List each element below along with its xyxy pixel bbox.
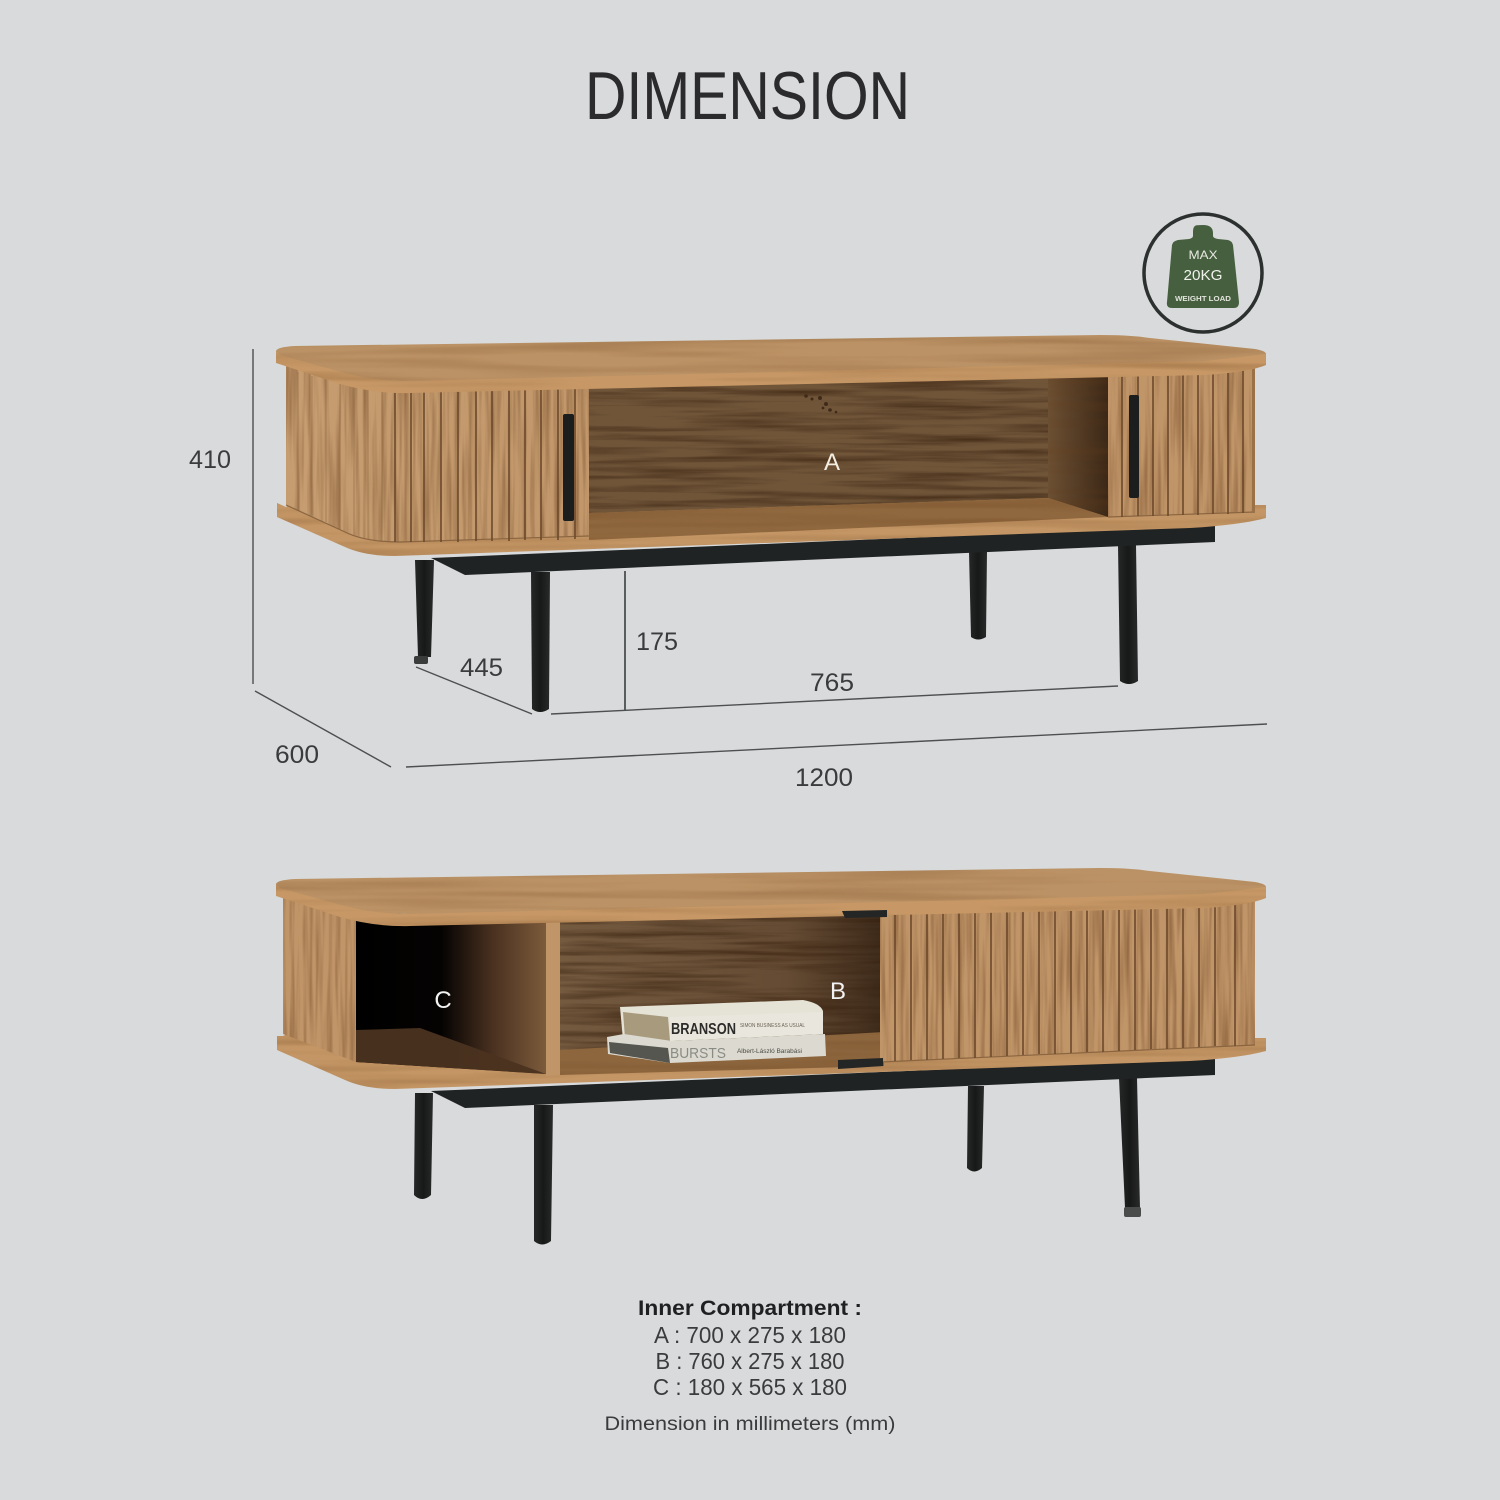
dimension numbers bbox=[189, 446, 854, 792]
dimension lines, table 1 bbox=[253, 349, 1267, 767]
books bbox=[607, 1000, 826, 1063]
book: Bursts: BURSTS bbox=[670, 1045, 726, 1062]
weight load badge: 20KG bbox=[1184, 268, 1222, 284]
table top view: closed left door bbox=[276, 335, 1266, 712]
table 1 cabinet body with sliding doors bbox=[286, 366, 1255, 542]
weight load badge: MAX bbox=[1188, 250, 1218, 262]
table 1 compartment A bbox=[589, 370, 1108, 540]
table 2 door brackets bbox=[838, 910, 887, 1069]
book: Bursts: Albert-László Barabási bbox=[737, 1048, 802, 1055]
table 1 legs and frame bbox=[414, 525, 1215, 712]
dimension numbers: 175 bbox=[636, 628, 678, 656]
inner compartment notes bbox=[604, 1297, 896, 1435]
notes heading: Inner Compartment : bbox=[638, 1297, 862, 1320]
table 2 sliding door bbox=[880, 895, 1255, 1062]
table 2 compartment C bbox=[356, 912, 546, 1074]
label A: A bbox=[824, 449, 840, 476]
dimension numbers: 445 bbox=[460, 654, 503, 682]
compartment B size: B : 760 x 275 x 180 bbox=[656, 1348, 844, 1374]
table 2 divider bbox=[546, 915, 560, 1076]
table 2 legs and frame bbox=[414, 1058, 1215, 1244]
dimension numbers: 765 bbox=[810, 669, 854, 697]
weight load badge bbox=[1144, 214, 1262, 332]
label B: B bbox=[830, 978, 846, 1005]
book: Branson: BRANSON bbox=[671, 1021, 736, 1038]
table 2 left end panel bbox=[283, 895, 356, 1062]
table 2 bottom shelf bbox=[277, 1028, 1266, 1089]
dimension numbers: 1200 bbox=[795, 764, 853, 792]
book: Branson bbox=[620, 1000, 823, 1041]
title: DIMENSION bbox=[585, 58, 910, 134]
label C: C bbox=[434, 987, 452, 1014]
table 2 compartment B bbox=[560, 908, 884, 1075]
units note: Dimension in millimeters (mm) bbox=[604, 1413, 896, 1435]
table 1 tabletop bbox=[276, 335, 1266, 393]
compartment C size: C : 180 x 565 x 180 bbox=[653, 1374, 847, 1400]
table 1 bottom shelf bbox=[277, 495, 1266, 556]
table 2 tabletop bbox=[276, 868, 1266, 926]
compartment A size: A : 700 x 275 x 180 bbox=[654, 1322, 846, 1348]
table lower view: door slid right bbox=[276, 868, 1266, 1244]
weight load badge: WEIGHT LOAD bbox=[1175, 294, 1232, 303]
dimension numbers: 600 bbox=[275, 741, 319, 769]
table 1 handles bbox=[563, 395, 1139, 521]
dimension numbers: 410 bbox=[189, 446, 231, 474]
book: Bursts bbox=[607, 1034, 826, 1063]
book: Branson: SIMON BUSINESS AS USUAL bbox=[740, 1023, 805, 1029]
